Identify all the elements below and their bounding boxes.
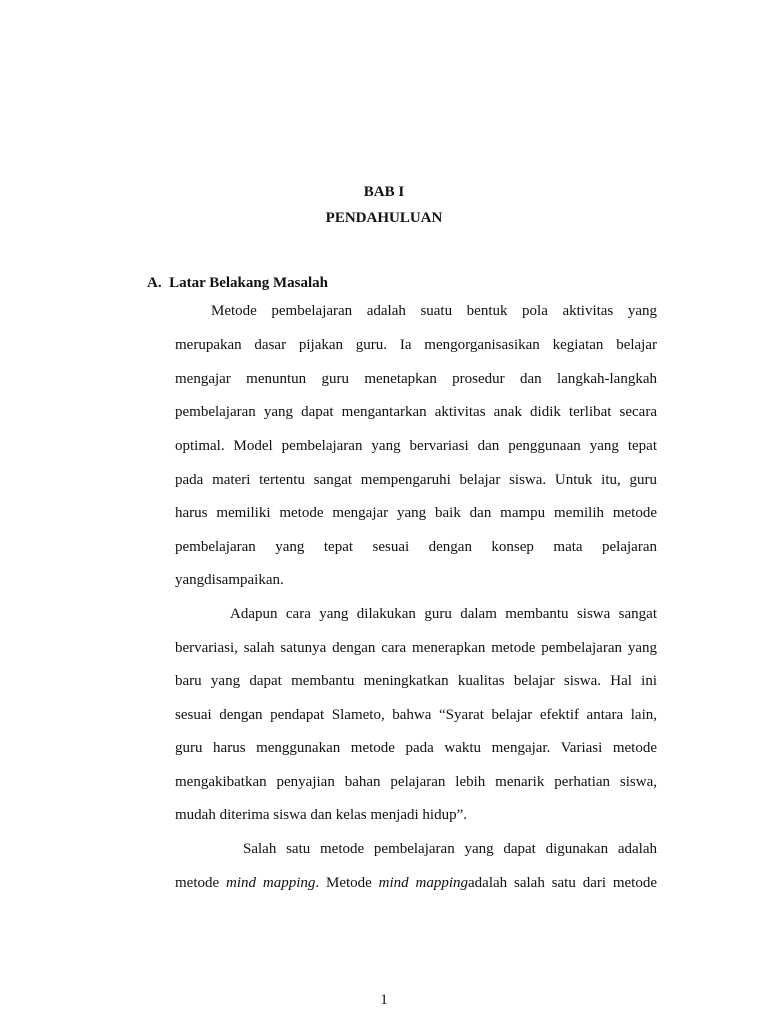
text block: paragraph 2: baru yang dapat membantu meningkatkan kualitas belajar siswa. Hal ini	[175, 673, 657, 689]
page number: 1	[380, 992, 388, 1008]
text block: paragraph 1: yangdisampaikan.	[175, 572, 284, 588]
text block: paragraph 1: pada materi tertentu sangat mempengaruhi belajar siswa. Untuk itu, guru	[175, 472, 657, 488]
text block: paragraph 1: pembelajaran yang tepat sesuai dengan konsep mata pelajaran	[175, 539, 657, 555]
text block: paragraph 1: optimal. Model pembelajaran yang bervariasi dan penggunaan yang tepat	[175, 438, 657, 454]
text block: paragraph 3: metode mind mapping. Metode mind mappingadalah salah satu dari metode	[175, 875, 657, 891]
text block: paragraph 1: mengajar menuntun guru menetapkan prosedur dan langkah-langkah	[175, 371, 657, 387]
section heading: A. Latar Belakang Masalah	[147, 275, 328, 291]
text block: paragraph 2	[175, 606, 657, 790]
text block: paragraph 2: mengakibatkan penyajian bahan pelajaran lebih menarik perhatian siswa,	[175, 774, 657, 790]
text block: paragraph 3	[175, 841, 657, 891]
text block: paragraph 3: Salah satu metode pembelajaran yang dapat digunakan adalah	[243, 841, 657, 857]
text block: paragraph 2 end: mudah diterima siswa dan kelas menjadi hidup”.	[175, 807, 467, 823]
text block: paragraph 2: sesuai dengan pendapat Slameto, bahwa “Syarat belajar efektif antara lain,	[175, 707, 657, 723]
text block: paragraph 2: bervariasi, salah satunya dengan cara menerapkan metode pembelajaran yang	[175, 640, 657, 656]
text block: paragraph 1: pembelajaran yang dapat mengantarkan aktivitas anak didik terlibat secara	[175, 404, 657, 420]
text block: paragraph 1: merupakan dasar pijakan guru. Ia mengorganisasikan kegiatan belajar	[175, 337, 657, 353]
text block: paragraph 1: Metode pembelajaran adalah suatu bentuk pola aktivitas yang	[211, 303, 657, 319]
text block: paragraph 2: Adapun cara yang dilakukan guru dalam membantu siswa sangat	[230, 606, 657, 622]
text block: paragraph 1: harus memiliki metode mengajar yang baik dan mampu memilih metode	[175, 505, 657, 521]
text block: paragraph 2: guru harus menggunakan metode pada waktu mengajar. Variasi metode	[175, 740, 657, 756]
text block: paragraph 1	[175, 303, 657, 588]
heading: chapter: BAB I	[364, 184, 404, 200]
heading: chapter title: PENDAHULUAN	[326, 210, 442, 226]
